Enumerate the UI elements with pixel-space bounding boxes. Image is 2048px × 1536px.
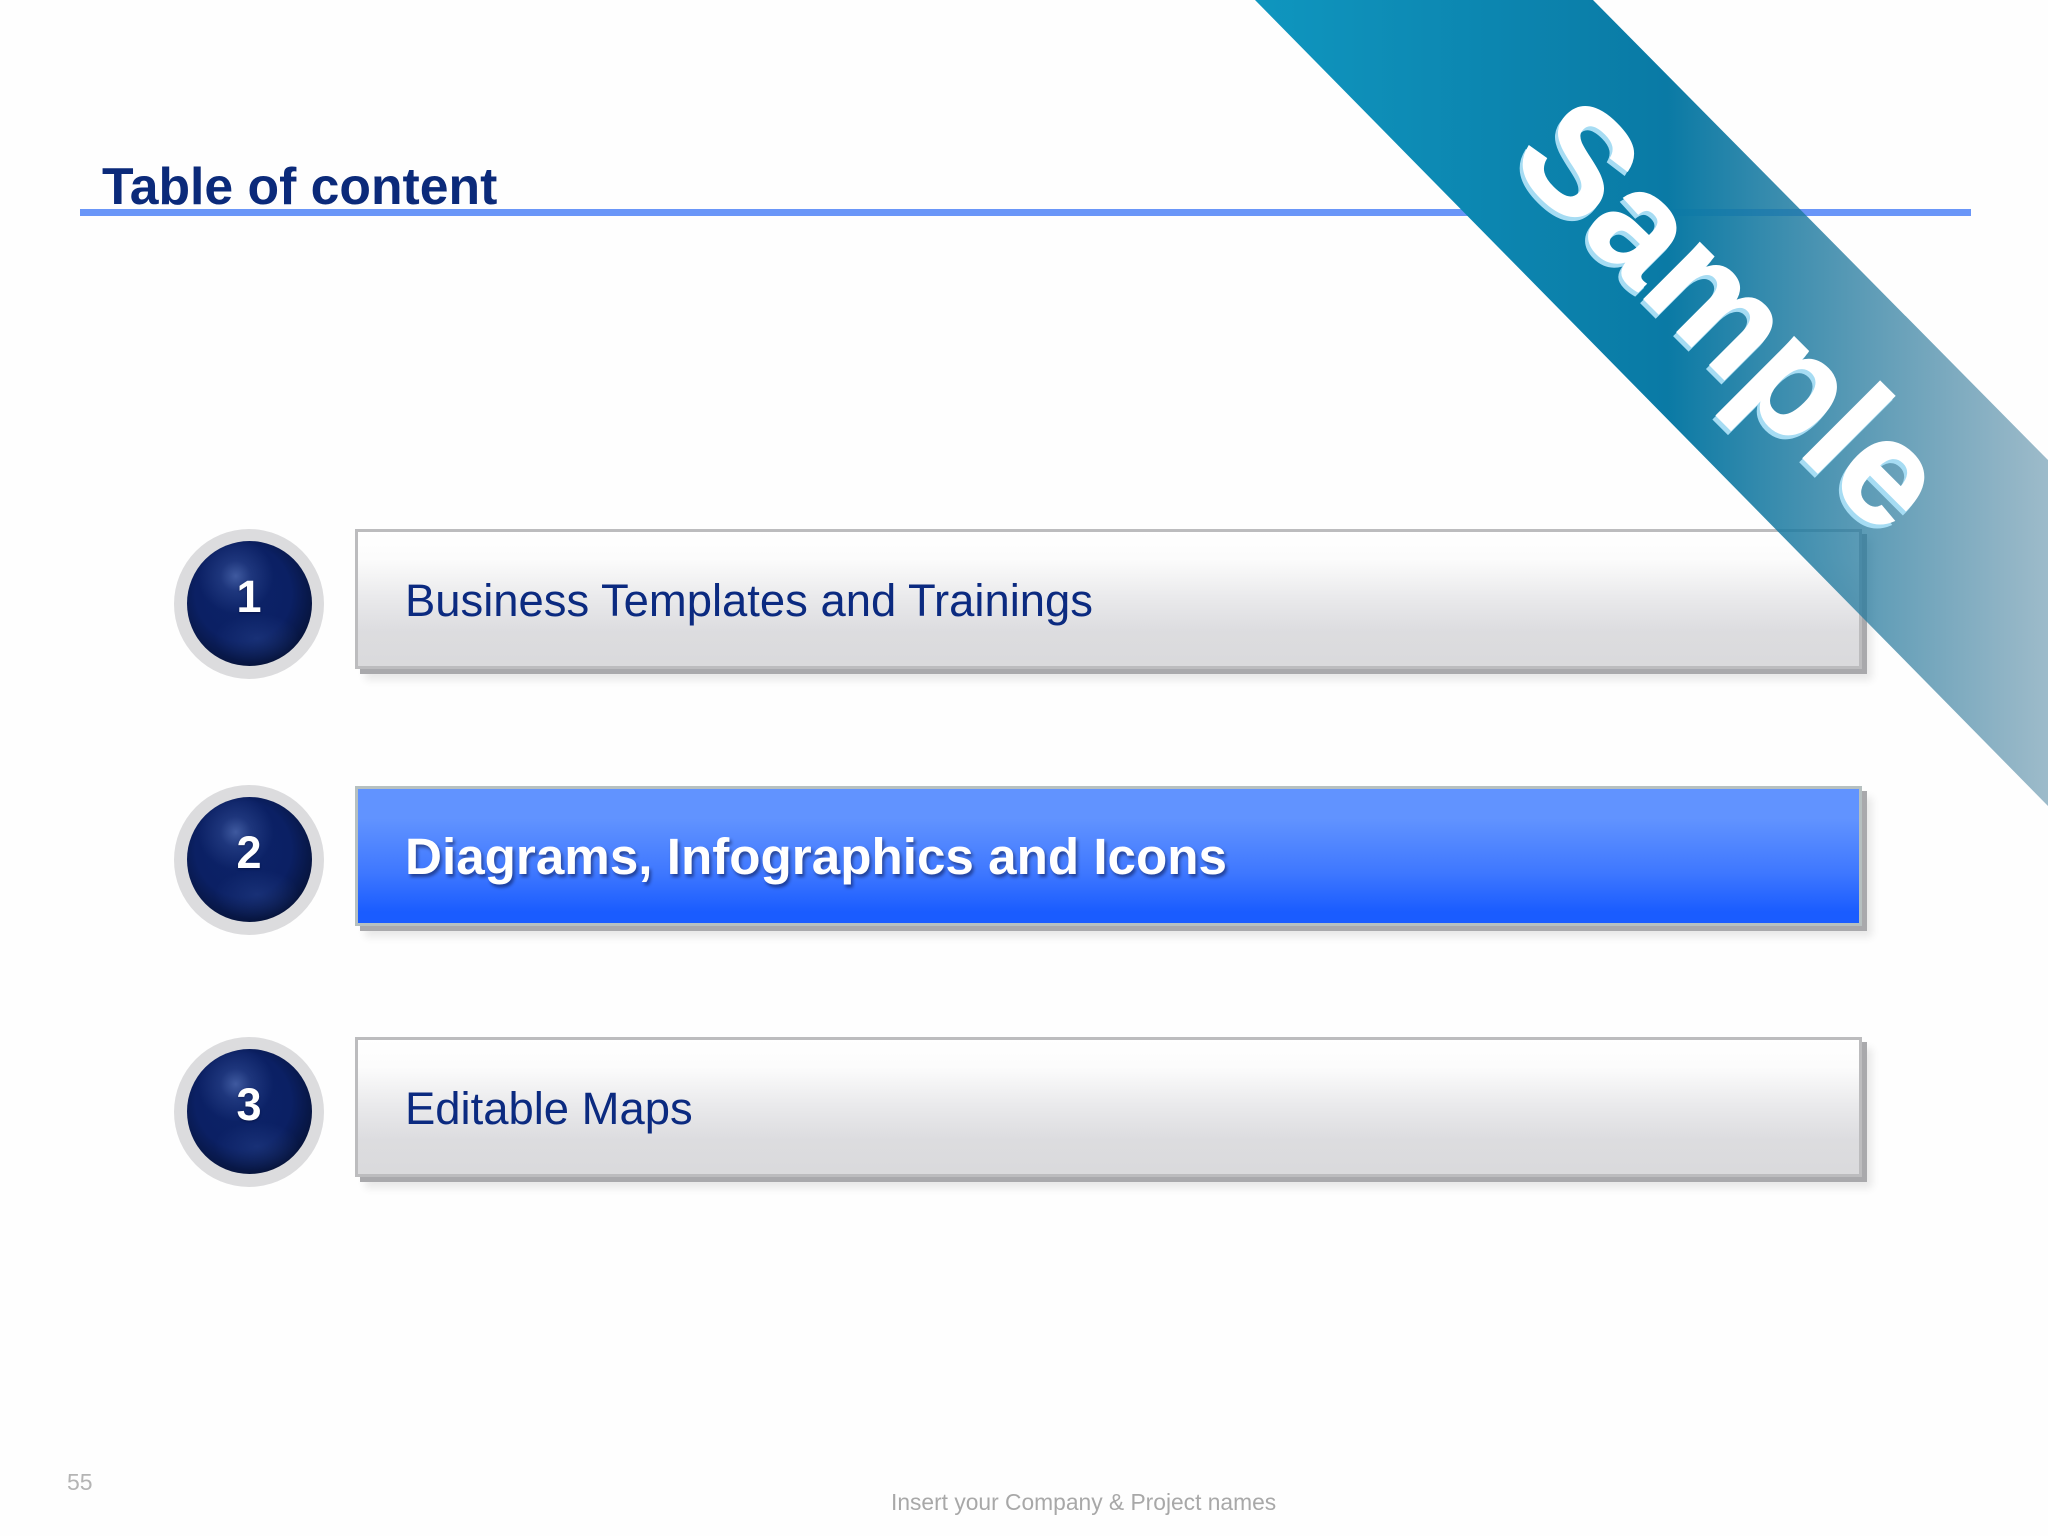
sphere 2 xyxy=(187,797,312,922)
digit 3: 3 xyxy=(236,1079,262,1130)
sphere 1 xyxy=(187,541,312,666)
number badge 1 xyxy=(174,529,324,679)
number badge 3 xyxy=(174,1037,324,1187)
page number: 55 xyxy=(67,1469,93,1495)
number badge 2 xyxy=(174,785,324,935)
ribbon label: Sample xyxy=(1484,66,1980,562)
panel: item 2 highlighted xyxy=(355,786,1862,926)
title: Table of content xyxy=(102,157,497,215)
footer text: Insert your Company & Project names xyxy=(891,1489,1276,1515)
item 1 text: Business Templates and Trainings xyxy=(405,575,1093,626)
sphere 3 xyxy=(187,1049,312,1174)
panel: item 1 xyxy=(355,529,1862,669)
item 2 text: Diagrams, Infographics and Icons xyxy=(405,828,1227,885)
ribbon band xyxy=(1255,0,2048,806)
item 3 text: Editable Maps xyxy=(405,1083,693,1134)
panel: item 3 xyxy=(355,1037,1862,1177)
digit 1: 1 xyxy=(236,571,262,622)
title underline xyxy=(80,209,1971,216)
digit 2: 2 xyxy=(236,827,262,878)
